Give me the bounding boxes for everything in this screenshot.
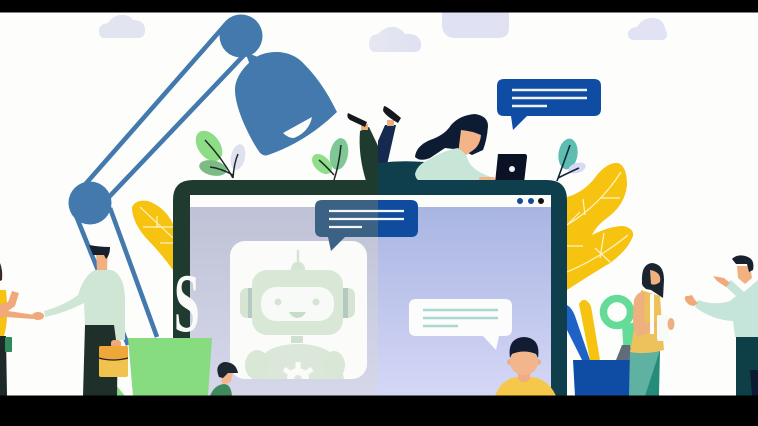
body and gear	[245, 344, 345, 379]
neck	[291, 336, 303, 343]
plant right	[556, 137, 587, 181]
scissors	[604, 298, 636, 360]
hand on briefcase	[111, 340, 121, 348]
shoes	[347, 113, 367, 127]
ankles	[361, 124, 368, 130]
briefcase	[99, 346, 128, 377]
yellow leaves right	[567, 163, 633, 290]
body	[44, 269, 125, 340]
hand	[32, 312, 44, 320]
desk lamp	[68, 14, 337, 345]
top black band	[0, 0, 758, 12]
cloud 3	[442, 12, 509, 38]
head	[96, 252, 108, 270]
hair	[89, 245, 110, 259]
legs	[83, 325, 118, 396]
chat bubble white	[409, 299, 512, 350]
cloud 2	[369, 27, 421, 52]
cloud 1	[99, 15, 145, 38]
green stems below briefcase	[96, 380, 125, 396]
ears	[240, 288, 256, 318]
cloud 4	[628, 18, 667, 40]
woman right	[629, 263, 674, 396]
shirt	[415, 148, 495, 182]
hand	[479, 177, 495, 181]
hair	[415, 114, 488, 160]
chat bubble centre	[315, 200, 418, 251]
screen right	[378, 207, 551, 396]
robot card	[230, 241, 367, 390]
bottom black band	[0, 396, 758, 426]
plant left of lamp	[190, 126, 248, 178]
frame right half	[378, 180, 567, 396]
face	[459, 130, 481, 155]
face	[261, 287, 334, 321]
top strip	[190, 195, 551, 207]
antenna	[292, 250, 304, 270]
monitor	[173, 180, 567, 396]
yellow leaf left	[132, 201, 173, 270]
man right	[685, 255, 758, 396]
laptop	[495, 154, 527, 183]
hips	[378, 161, 425, 182]
legs	[360, 127, 380, 181]
pencil cup	[567, 298, 636, 396]
plant by monitor centre	[308, 137, 351, 180]
chat bubble top right	[497, 79, 601, 130]
boy at bottom of screen	[495, 337, 556, 396]
plant pot	[128, 338, 212, 396]
head	[252, 270, 343, 335]
screen left	[190, 207, 378, 396]
woman lying on monitor	[347, 106, 527, 183]
small person bottom	[210, 362, 238, 396]
white letter S: S	[174, 257, 200, 350]
window dots	[517, 198, 544, 204]
frame left half	[173, 180, 378, 396]
woman shaking hands	[0, 263, 35, 396]
man shaking hands	[32, 245, 128, 396]
